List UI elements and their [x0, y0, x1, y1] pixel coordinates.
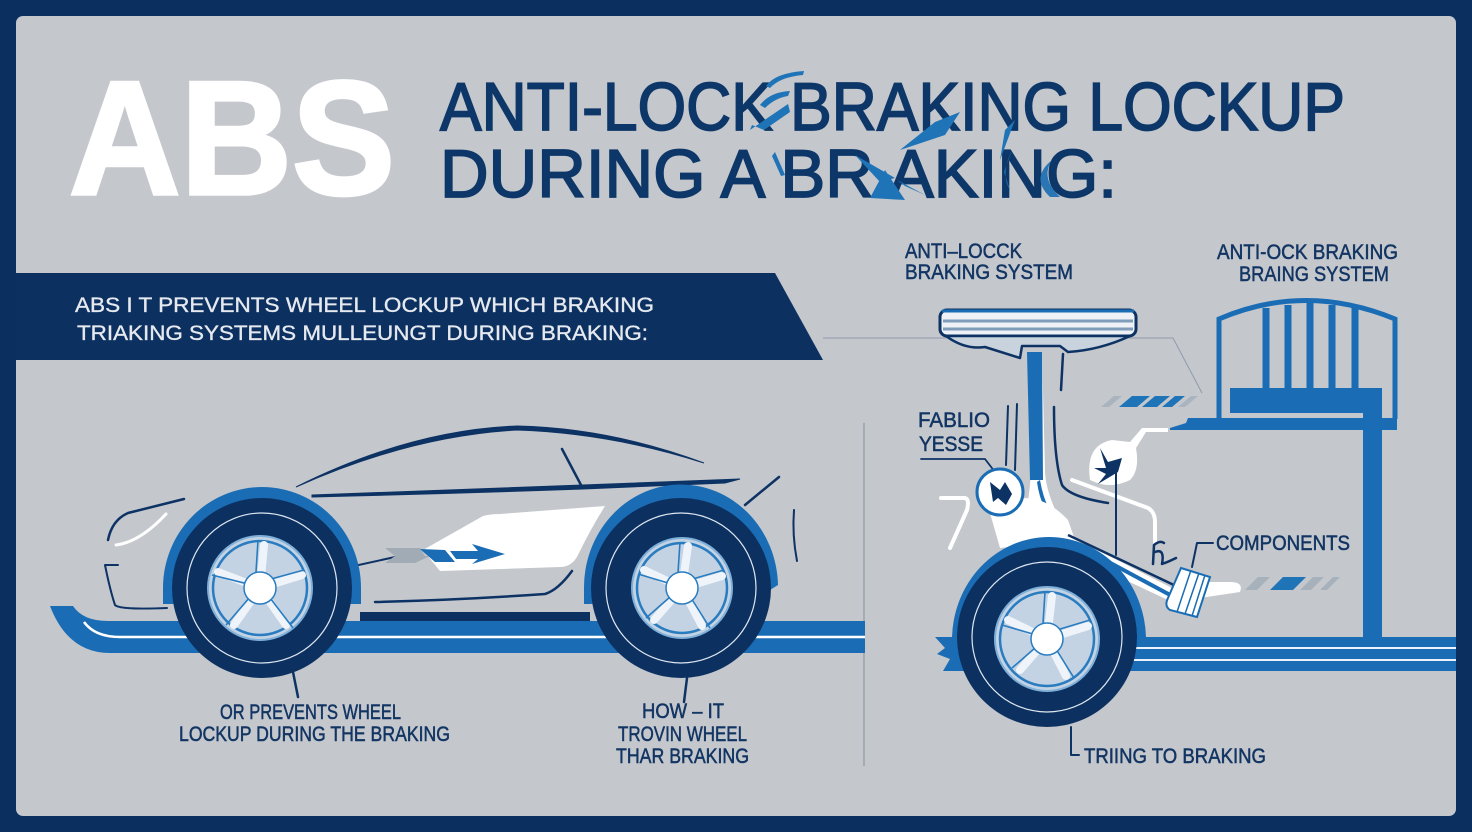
- leader: bottom: [1071, 727, 1079, 755]
- label: how it: [616, 700, 749, 768]
- banner text: [75, 294, 654, 345]
- label: fablio yesse: [918, 409, 990, 456]
- label: anti-lock braking system right: [1217, 241, 1398, 286]
- roof line: [296, 426, 704, 487]
- leader: bubble down: [1115, 470, 1117, 555]
- icon: squiggle: [1153, 542, 1176, 564]
- label: prevents wheel: [179, 701, 450, 746]
- label: how it: THAR BRAKING: [616, 745, 749, 768]
- label: anti-lock braking system right: BRAING SYSTEM: [1239, 263, 1389, 286]
- label: anti-lock braking system left: BRAKING SYSTEM: [905, 261, 1073, 284]
- label: how it: TROVIN WHEEL: [618, 723, 747, 746]
- divider: [863, 423, 865, 766]
- leader: fablio: [921, 459, 995, 472]
- wheel: rear: [584, 485, 778, 678]
- tower structure: [1170, 300, 1397, 639]
- label: how it: HOW – IT: [642, 700, 724, 723]
- label: components: COMPONENTS: [1216, 532, 1350, 555]
- label: prevents wheel: OR PREVENTS WHEEL: [220, 701, 401, 724]
- wheel: right diagram: [952, 537, 1146, 727]
- label: fablio yesse: YESSE: [919, 433, 983, 456]
- label: anti-lock braking system left: ANTI–LOCCK: [905, 240, 1022, 263]
- icon: control bubble: [1089, 428, 1168, 485]
- hatch stripes: upper: [1101, 396, 1198, 407]
- label: trying to braking: TRIING TO BRAKING: [1084, 745, 1266, 768]
- heading: anti-lock braking lockup during a braking: ANTI-LOCK BRAKING LOCKUP: [440, 69, 1345, 145]
- wheel: front: [163, 487, 361, 678]
- icon: circle valve: [977, 469, 1023, 515]
- white pipes: [941, 480, 1155, 548]
- road: right: [935, 637, 1456, 671]
- banner text: TRIAKING SYSTEMS MULLEUNGT DURING BRAKING:: [77, 322, 648, 345]
- label: anti-lock braking system right: ANTI-OCK BRAKING: [1217, 241, 1398, 264]
- leader: components: [1192, 543, 1213, 567]
- banner: [16, 273, 823, 360]
- brake pedal disc and column: [940, 310, 1136, 548]
- belt line: [312, 479, 740, 497]
- hatch stripes: lower: [1245, 577, 1340, 590]
- label: fablio yesse: FABLIO: [918, 409, 990, 432]
- banner text: ABS I T PREVENTS WHEEL LOCKUP WHICH BRAKING: [75, 294, 654, 317]
- car body: [105, 426, 797, 609]
- title: ABS: ABS: [69, 48, 395, 229]
- heading: anti-lock braking lockup during a braking: [440, 69, 1345, 212]
- label: anti-lock braking system left: [905, 240, 1073, 284]
- white side panel: [423, 506, 605, 571]
- label: prevents wheel: LOCKUP DURING THE BRAKING: [179, 723, 450, 746]
- road: left: [50, 606, 865, 653]
- pedal arm: [1068, 535, 1176, 600]
- leader lines under car: [293, 672, 687, 702]
- arrow: [345, 557, 395, 568]
- connector line from banner to pedal: [823, 338, 1202, 393]
- heading: anti-lock braking lockup during a braking: DURING A BR AKING:: [440, 136, 1117, 212]
- pedal: [1166, 568, 1241, 617]
